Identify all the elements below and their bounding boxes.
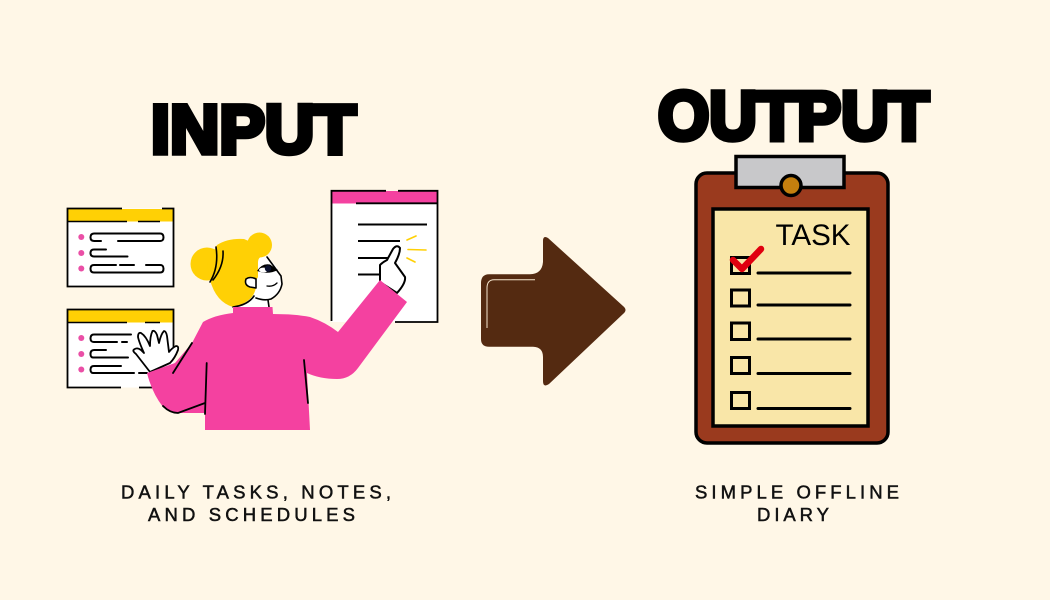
pink sweater (147, 280, 407, 430)
clip rivet (781, 176, 801, 196)
sweater fold lines (163, 343, 308, 414)
heading: OUTPUT: OUTPUT (658, 78, 929, 154)
arrow pointing right (481, 237, 626, 385)
red check mark (733, 249, 761, 269)
clipboard (696, 156, 888, 443)
panel: pink header note (332, 191, 438, 322)
clipboard board (696, 173, 888, 443)
hair and buns (190, 232, 272, 307)
panel: upper left task card (68, 208, 174, 286)
neck and face (232, 256, 282, 308)
eye (257, 264, 278, 273)
caption: input: AND SCHEDULES (148, 504, 355, 525)
icon: yellow sparkle lines (407, 236, 426, 262)
caption: output (695, 482, 899, 525)
ear (246, 278, 256, 288)
clipboard clip (736, 156, 844, 188)
panel: lower left task card (68, 310, 174, 388)
checklist rows (732, 258, 850, 408)
paper (713, 209, 868, 426)
label: TASK: TASK (776, 219, 850, 252)
pointing hand (380, 246, 405, 293)
arrow highlight (487, 280, 535, 328)
caption: input (121, 482, 391, 525)
caption: input: DAILY TASKS, NOTES, (121, 482, 391, 502)
caption: output: SIMPLE OFFLINE (695, 482, 899, 502)
hair strands, face features and collar lines (210, 247, 282, 307)
left waving hand (133, 331, 178, 372)
illustration: person organising notes (68, 191, 438, 430)
heading: INPUT: INPUT (151, 91, 356, 168)
caption: output: DIARY (757, 504, 829, 525)
